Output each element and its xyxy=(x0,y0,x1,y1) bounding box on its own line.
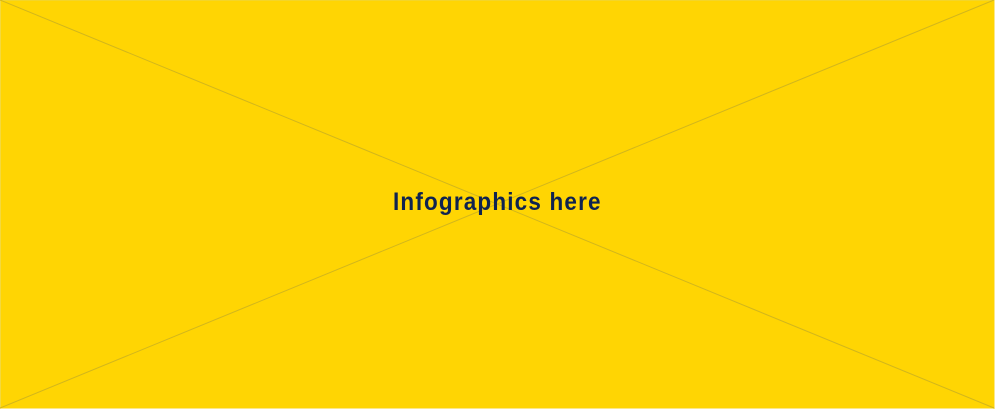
heading: placeholder text: Infographics here xyxy=(393,188,602,216)
